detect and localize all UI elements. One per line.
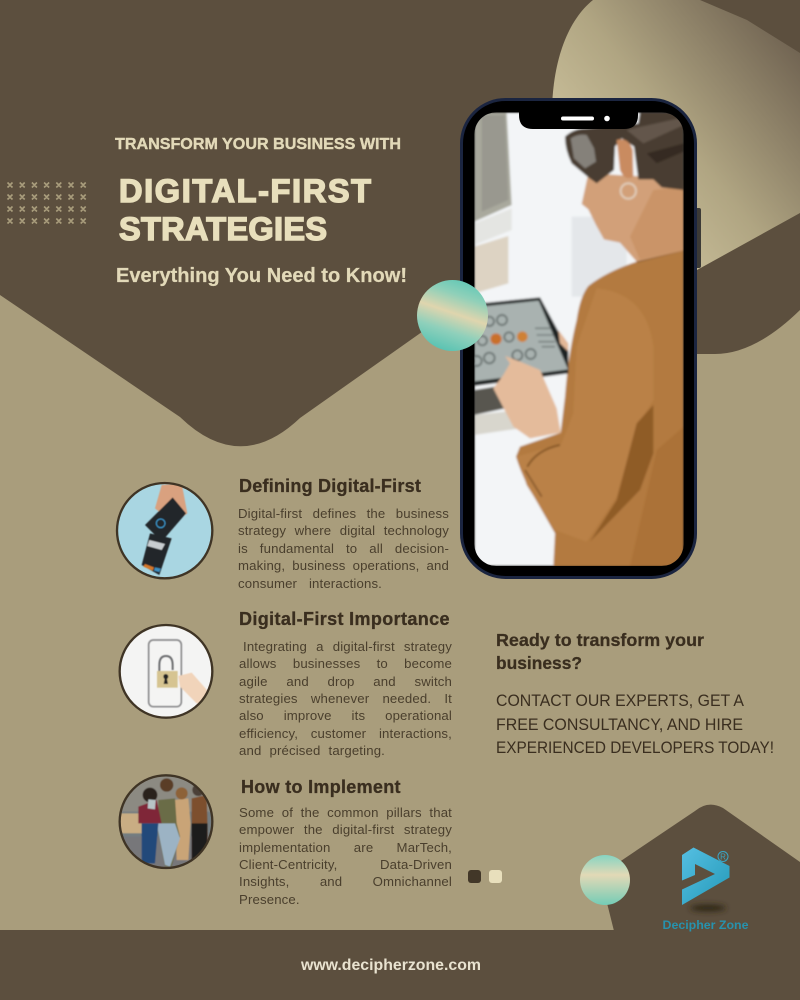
phone body <box>462 100 696 578</box>
section: Defining Digital-First <box>238 476 449 590</box>
call to action question: business? <box>496 653 582 673</box>
jacket <box>516 248 684 567</box>
tablet <box>474 297 568 386</box>
call to action <box>496 630 774 757</box>
circle image: payment terminal <box>117 483 212 578</box>
text: Defining Digital-First body: is fundamental to all decision- <box>238 540 449 556</box>
Decipher Zone logo <box>662 848 748 932</box>
text: Digital-First Importance body <box>239 639 452 758</box>
pagination dots <box>468 870 502 883</box>
circle image: padlock on phone <box>120 625 212 718</box>
text: Defining Digital-First body: Digital-first defines the business <box>238 506 449 521</box>
text: How to Implement body: Some of the common pillars that <box>239 805 452 820</box>
call to action message: FREE CONSULTANCY, AND HIRE <box>496 716 743 734</box>
text: How to Implement body: empower the digital-first strategy <box>239 822 452 837</box>
text: How to Implement body: Client-Centricity, Data-Driven <box>239 857 452 872</box>
main title <box>119 173 371 247</box>
hands <box>493 356 561 438</box>
small gradient orb <box>580 855 630 905</box>
kicker heading: TRANSFORM YOUR BUSINESS WITH <box>115 136 401 153</box>
hair <box>565 112 684 190</box>
call to action message: EXPERIENCED DEVELOPERS TODAY! <box>496 739 774 757</box>
text: How to Implement body: implementation are MarTech, <box>239 840 452 855</box>
phone mockup with photo <box>462 100 701 578</box>
gradient orb <box>417 280 488 351</box>
phone camera <box>604 116 610 121</box>
main title: STRATEGIES <box>119 211 327 247</box>
text: How to Implement body <box>239 805 452 907</box>
corner panel behind logo <box>600 805 800 931</box>
text: Digital-First Importance body: allows businesses to become <box>239 656 452 671</box>
background shape: dark top panel with chevron <box>0 0 800 446</box>
heading: Digital-First Importance: Digital-First Importance <box>239 609 450 629</box>
text: Digital-First Importance body: and précised targeting. <box>239 743 385 758</box>
text: How to Implement body: Insights, and Omnichannel <box>239 874 452 889</box>
phone speaker <box>561 116 594 120</box>
text: Digital-First Importance body: Integrating a digital-first strategy <box>243 639 452 654</box>
text: Digital-First Importance body: strategies whenever needed. It <box>239 691 452 706</box>
section: How to Implement <box>239 777 452 907</box>
subtitle: Everything You Need to Know! <box>116 265 407 287</box>
main title: DIGITAL-FIRST <box>119 173 371 209</box>
neck and face <box>582 173 684 262</box>
section: Digital-First Importance <box>239 609 452 758</box>
decorative x pattern <box>8 182 86 224</box>
text: Digital-First Importance body: efficiency, customer interactions, <box>239 726 452 741</box>
ear and earring <box>617 139 633 178</box>
text: Digital-First Importance body: also improve its operational <box>239 708 452 723</box>
text: Digital-First Importance body: agile and drop and switch <box>239 674 452 689</box>
circle image: group of people with devices <box>118 775 215 868</box>
footer bar <box>0 930 800 1000</box>
phone side button <box>695 208 701 268</box>
text: Defining Digital-First body <box>238 506 449 590</box>
text: Defining Digital-First body: strategy where digital technology <box>238 523 449 538</box>
heading: How to Implement: How to Implement <box>241 777 401 797</box>
text: How to Implement body: Presence. <box>239 892 300 907</box>
call to action message: CONTACT OUR EXPERTS, GET A <box>496 692 744 710</box>
call to action message <box>496 692 774 757</box>
Decipher Zone logo: Decipher Zone <box>662 920 748 932</box>
phone notch <box>519 112 638 129</box>
call to action question: Ready to transform your <box>496 630 704 650</box>
call to action question <box>496 630 704 673</box>
photo: woman using tablet <box>472 112 684 567</box>
heading: Defining Digital-First: Defining Digital-First <box>239 476 421 496</box>
text: Defining Digital-First body: consumer interactions. <box>238 576 382 590</box>
text: Defining Digital-First body: making, business operations, and <box>238 558 449 573</box>
website url: www.decipherzone.com <box>300 957 481 974</box>
background shape: gradient blob <box>552 0 800 300</box>
Decipher Zone logo: R <box>720 852 726 862</box>
